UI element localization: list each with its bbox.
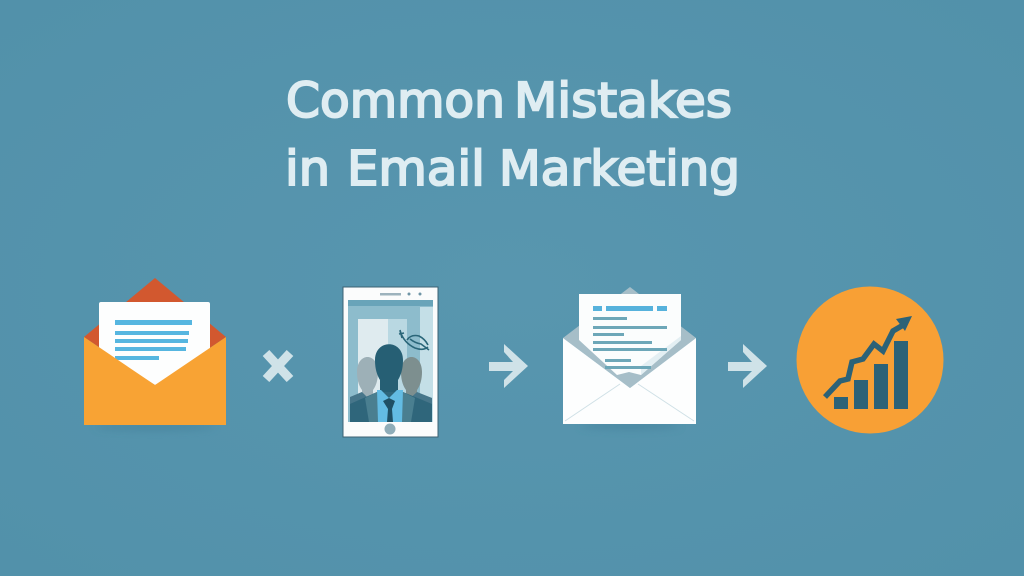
icon: white envelope with letter [563,287,696,429]
icon: cross [266,353,290,379]
letter [579,294,681,375]
bars [834,341,908,409]
title: Common [286,73,505,129]
title: Email [347,141,485,197]
broken bird doodle [399,330,429,350]
envelope front [563,338,696,424]
trend arrow [825,316,912,397]
back flap [563,287,696,388]
arrow 2 [728,344,767,388]
background person right [395,357,432,422]
icon: growth chart in orange circle [796,286,944,434]
phone screen [348,300,433,422]
envelope back flap [84,278,226,385]
main person [350,344,432,422]
icon: phone with people [343,287,438,437]
arrow 1 [489,344,528,388]
background person left [350,357,385,422]
title: Mistakes [514,73,732,129]
envelope front [84,337,226,425]
title: in [285,141,330,197]
icon: orange envelope with letter [84,278,226,430]
title [285,73,740,197]
letter [99,302,210,385]
title: Marketing [499,141,740,197]
